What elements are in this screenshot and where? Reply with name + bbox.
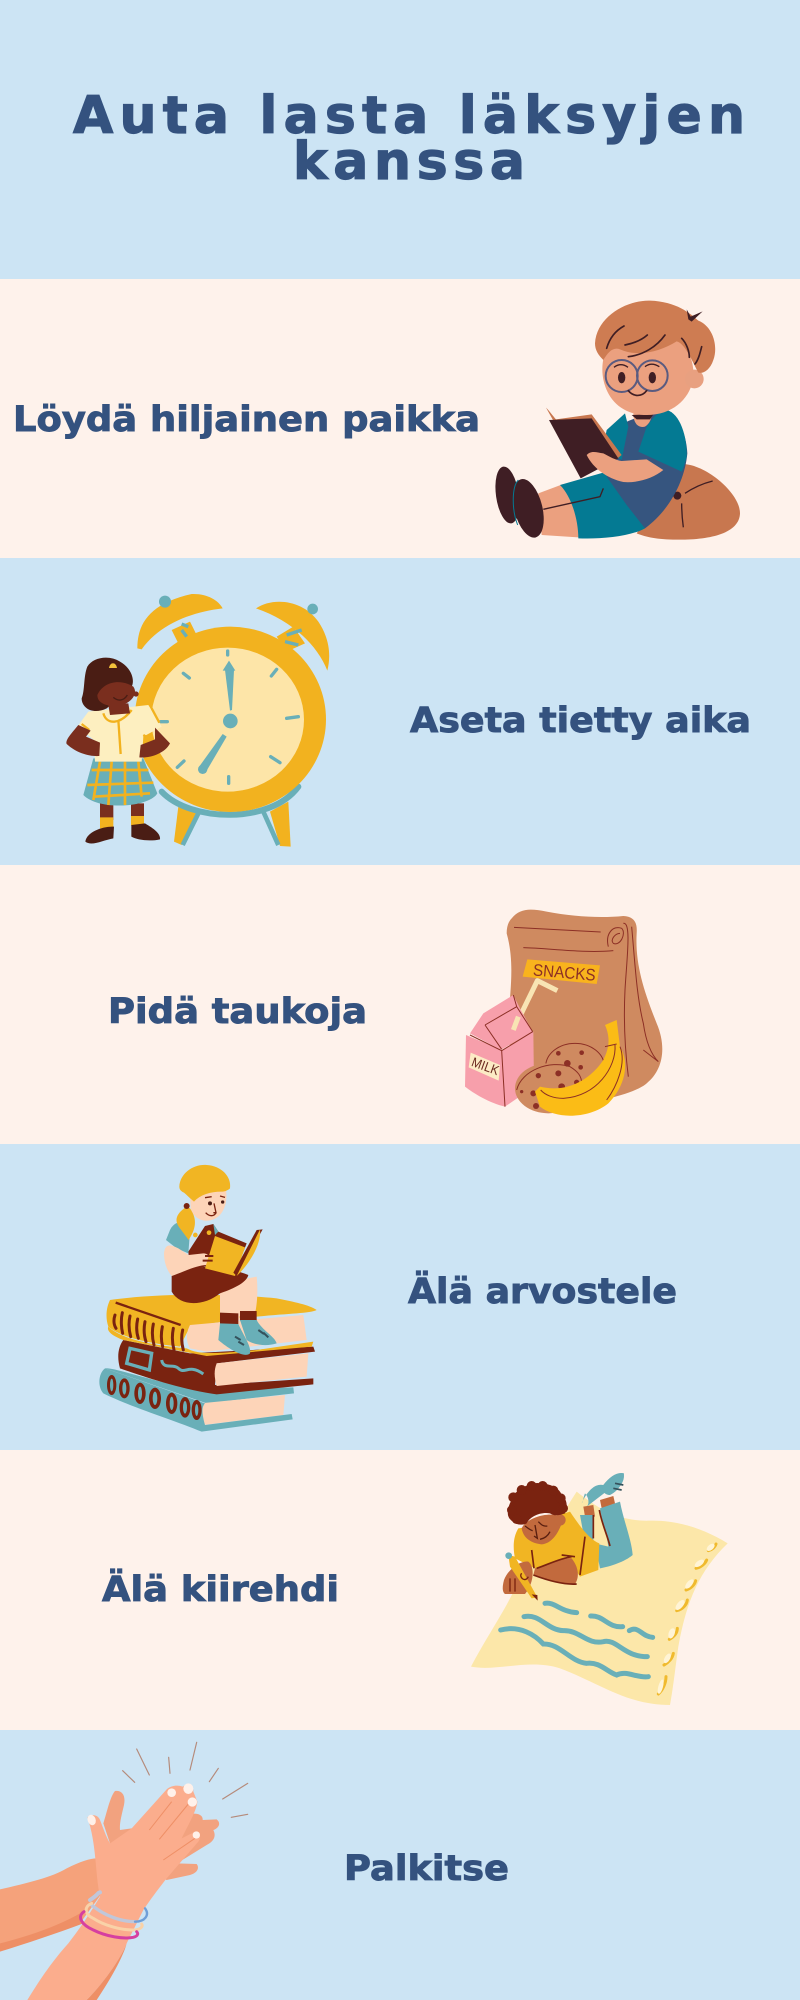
panel: title bbox=[0, 0, 800, 279]
title: Auta lasta läksyjen bbox=[73, 86, 745, 146]
panel: don't rush bbox=[0, 1450, 800, 1730]
heading: quiet place: Löydä hiljainen paikka bbox=[13, 400, 480, 440]
icon: clapping hands bbox=[0, 1742, 248, 2000]
panel: set a time bbox=[0, 558, 800, 865]
icon: boy writing on a big sheet of paper bbox=[471, 1473, 728, 1705]
panel: take breaks bbox=[0, 865, 800, 1144]
icon: snack bag, milk, cookies and banana bbox=[465, 910, 662, 1116]
panel: reward bbox=[0, 1730, 800, 2000]
icon: snack bag, milk, cookies and banana: MILK bbox=[470, 1054, 501, 1078]
title: kanssa bbox=[293, 132, 525, 192]
heading: don't judge: Älä arvostele bbox=[408, 1270, 677, 1312]
panel: don't judge bbox=[0, 1144, 800, 1450]
heading: take breaks: Pidä taukoja bbox=[108, 992, 367, 1032]
icon: snack bag, milk, cookies and banana: SNACKS bbox=[532, 960, 596, 985]
icon: alarm clock and girl bbox=[66, 594, 329, 847]
icon: girl reading on a stack of books bbox=[99, 1165, 317, 1432]
heading: reward: Palkitse bbox=[344, 1849, 509, 1889]
title bbox=[73, 86, 745, 192]
heading: don't rush: Älä kiirehdi bbox=[102, 1568, 339, 1610]
icon: boy reading on bean bag bbox=[492, 301, 740, 541]
panel: quiet place bbox=[0, 279, 800, 558]
heading: set a time: Aseta tietty aika bbox=[410, 701, 751, 741]
